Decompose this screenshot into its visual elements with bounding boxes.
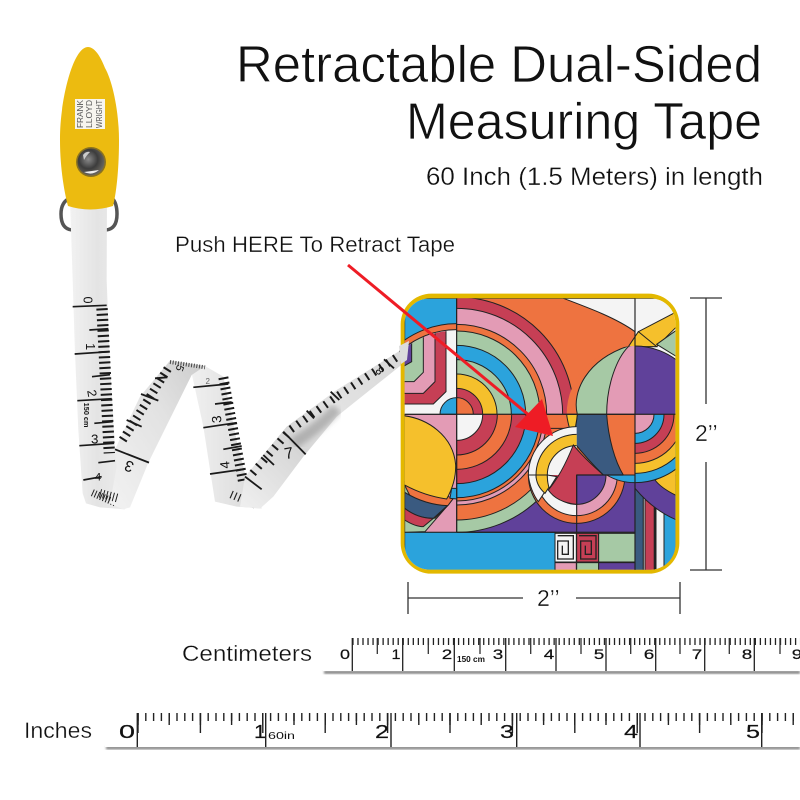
product: square tape case with geometric art xyxy=(400,294,680,574)
tape segment 1: 3 xyxy=(91,431,98,446)
ruler: inch scale: 1 xyxy=(254,722,266,742)
tape segment 3 (behind): 2 xyxy=(205,377,210,386)
ruler: centimeter scale: 7 xyxy=(692,647,702,662)
tape segment 1: 0 xyxy=(81,296,95,304)
fob logo label: LLOYD xyxy=(85,100,94,128)
dimension: width 2 inches: 2’’ xyxy=(537,585,560,611)
ruler: centimeter scale: 0 xyxy=(340,647,350,662)
label: centimeters: Centimeters xyxy=(182,641,312,666)
tape segment 4 xyxy=(240,345,408,509)
tape exit tip over case edge xyxy=(399,341,409,364)
tape segment 2: 5 xyxy=(173,363,186,373)
tape segment 2 xyxy=(100,361,205,509)
ruler: centimeter scale: 3 xyxy=(493,647,503,662)
yellow case border xyxy=(401,294,679,574)
ruler: inch scale: 4 xyxy=(624,722,638,742)
label: inches: Inches xyxy=(24,718,92,743)
ruler: centimeter scale: 2 xyxy=(442,647,452,662)
title: Measuring Tape xyxy=(406,93,762,151)
curled measuring tape xyxy=(70,200,408,509)
icon: metal d-ring xyxy=(61,198,117,230)
icon: metal snap xyxy=(76,147,106,177)
tape segment 1: 1 xyxy=(83,343,97,350)
tape segment 4: 8 xyxy=(372,363,388,378)
tape segment 3 (behind): 4 xyxy=(217,460,233,469)
panel: top center concentric arcs xyxy=(456,298,636,414)
tape segment 2: 3 xyxy=(122,456,136,475)
ruler: centimeter scale: 6 xyxy=(644,647,654,662)
tape segment 4: 7 xyxy=(283,445,295,463)
tape segment 3 (behind) xyxy=(192,366,262,508)
dimension: height 2 inches: 2’’ xyxy=(695,420,718,446)
ruler: centimeter scale: 5 xyxy=(594,647,604,662)
ruler: centimeter scale: 9 xyxy=(792,647,800,662)
dimension: width 2 inches xyxy=(408,582,680,614)
tape segment 1 xyxy=(70,200,125,509)
callout: push here label: Push HERE To Retract Tape xyxy=(175,232,455,257)
ruler: centimeter scale: 1 xyxy=(392,647,400,662)
dimension: height 2 inches xyxy=(690,298,722,570)
title xyxy=(236,36,762,151)
fob logo label: WRIGHT xyxy=(95,100,104,128)
tape segment 3 (behind): 3 xyxy=(209,415,224,424)
panel: top right lens circle xyxy=(566,298,676,414)
fob logo label: FRANK xyxy=(76,99,85,128)
tape segment 1: 4 xyxy=(95,472,101,484)
ruler: centimeter scale xyxy=(323,636,800,674)
panel: top left octagon quadrant xyxy=(404,298,458,415)
panel: left yellow circle xyxy=(403,414,457,532)
ruler: inch scale: 3 xyxy=(500,722,514,742)
panel: lower center rings xyxy=(457,414,634,533)
fob logo label xyxy=(75,99,105,129)
arrow: red arrow pointing at push button xyxy=(348,265,553,436)
subtitle: length: 60 Inch (1.5 Meters) in length xyxy=(426,163,763,191)
ruler: centimeter scale: 8 xyxy=(742,647,752,662)
panel: bottom band with spiral squares xyxy=(405,532,635,571)
yellow leather fob xyxy=(60,47,119,210)
ruler: centimeter scale: 4 xyxy=(544,647,555,662)
ruler: inch scale xyxy=(105,711,800,750)
ruler: inch scale: 0 xyxy=(119,722,135,742)
ruler: inch scale: 5 xyxy=(746,722,760,742)
tape segment 1: 2 xyxy=(84,389,99,398)
ruler: inch scale: 2 xyxy=(375,722,389,742)
tape segment 1: 150 cm xyxy=(82,403,91,428)
panel: right concentric rings xyxy=(606,414,676,570)
ruler: centimeter scale: 150 cm xyxy=(457,654,485,664)
title: Retractable Dual-Sided xyxy=(236,36,762,94)
ruler: inch scale: 60in xyxy=(268,730,295,742)
